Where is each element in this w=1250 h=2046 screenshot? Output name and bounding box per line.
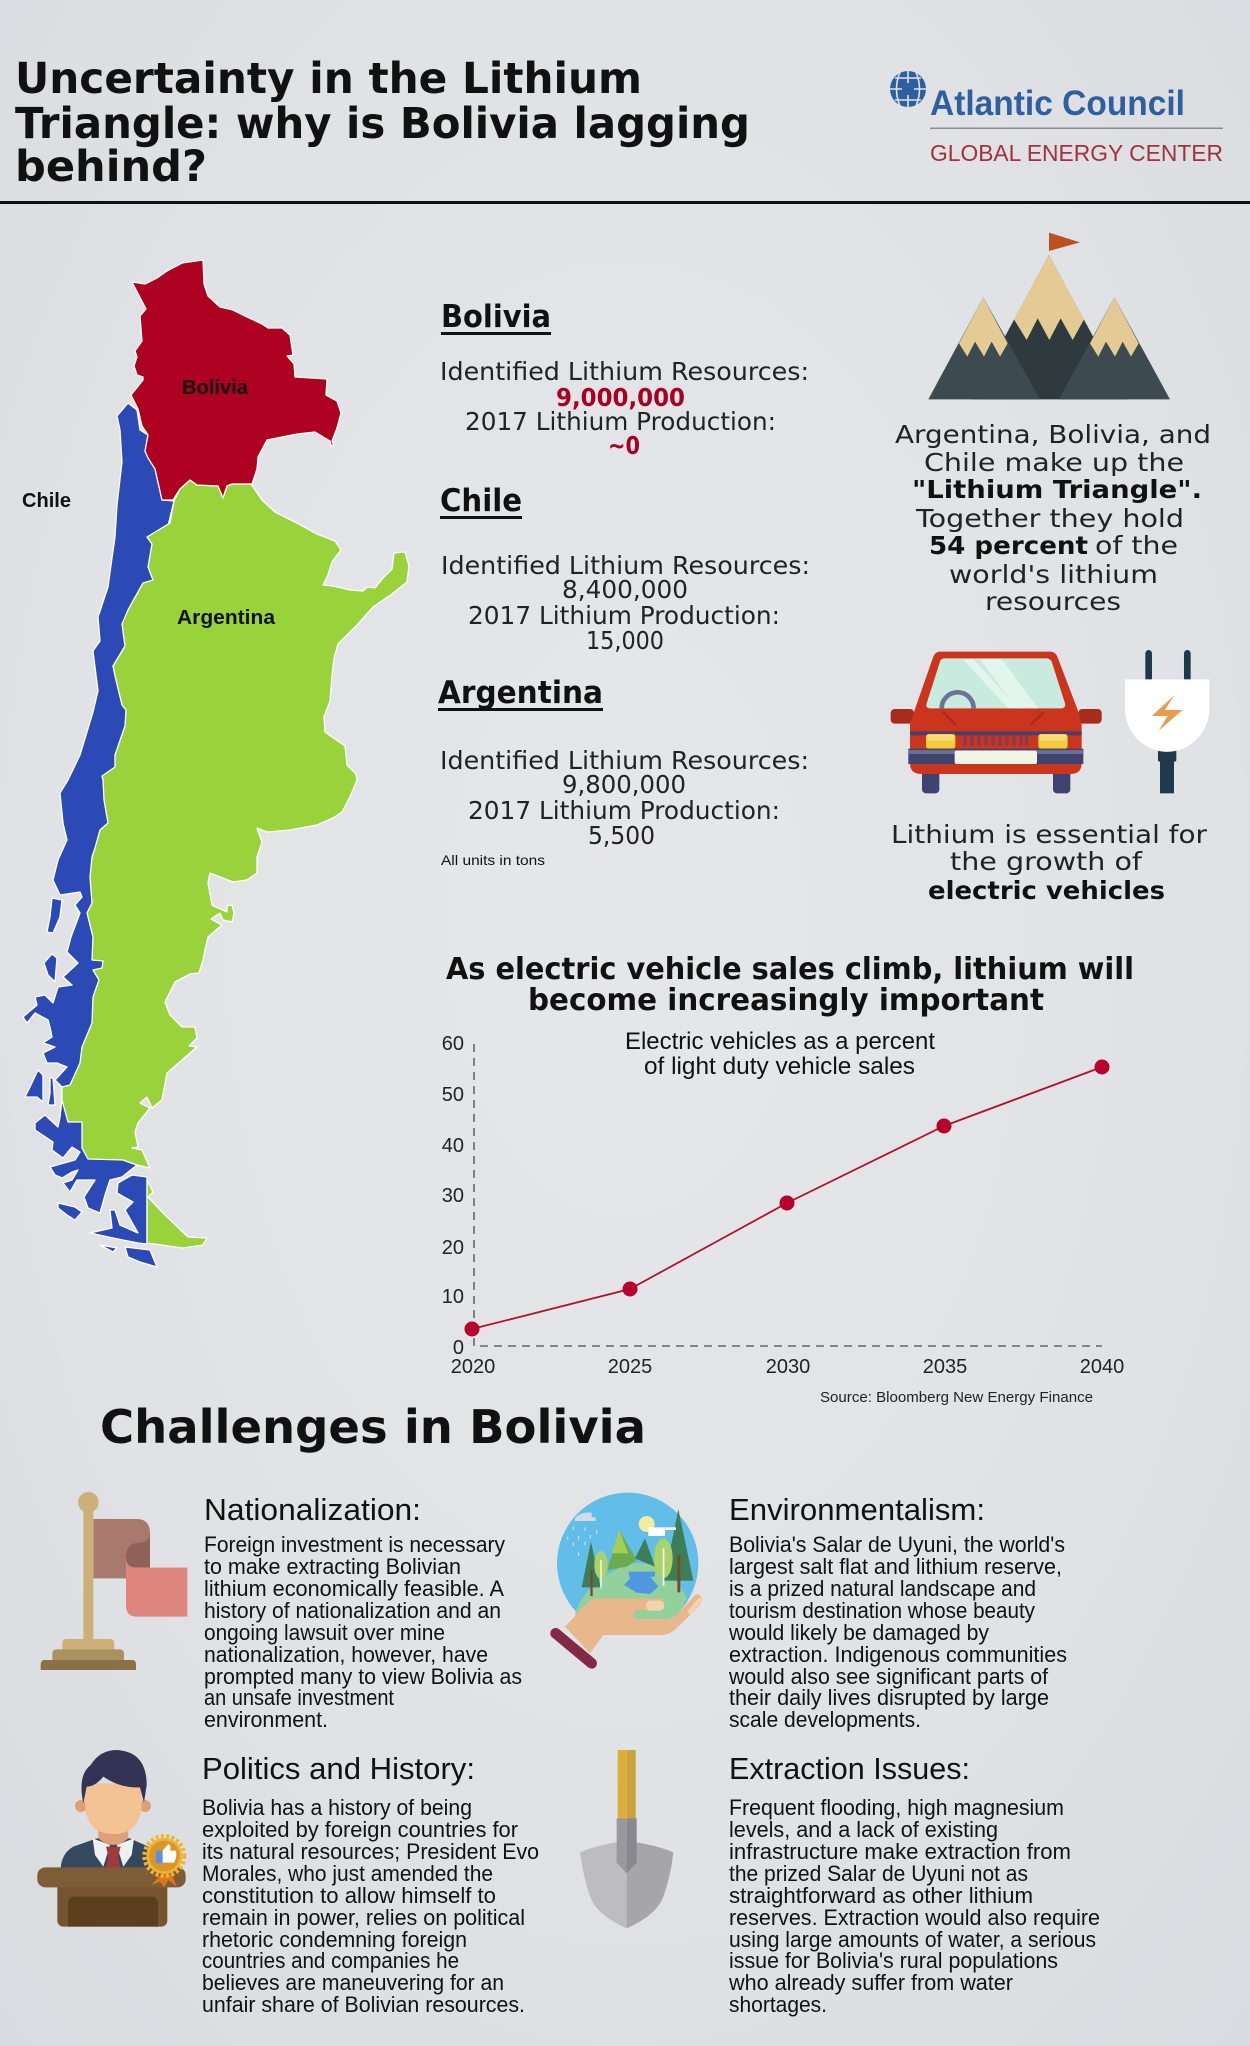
panel: Extraction Issues xyxy=(728,1751,1100,2017)
chart heading xyxy=(446,952,1134,1018)
source note: Source: Bloomberg New Energy Finance xyxy=(820,1389,1093,1406)
panel: Bolivia stats: Identified Lithium Resources: xyxy=(440,357,809,386)
panel: Extraction Issues: reserves. Extraction would also require xyxy=(729,1905,1100,1930)
map region: Bolivia xyxy=(131,260,341,500)
panel: Nationalization: ongoing lawsuit over mine xyxy=(204,1620,445,1645)
map label: Argentina: Argentina xyxy=(177,607,276,629)
map label: Chile: Chile xyxy=(22,490,71,512)
panel: Extraction Issues: shortages. xyxy=(729,1992,827,2017)
panel: Extraction Issues: straightforward as other lithium xyxy=(729,1883,1033,1908)
panel: Chile stats: 8,400,000 xyxy=(562,575,688,604)
panel: Politics and History: Bolivia has a history of being xyxy=(202,1795,472,1820)
panel: Environmentalism: their daily lives disrupted by large xyxy=(729,1685,1049,1710)
text: Lithium Triangle description: Argentina, Bolivia, and xyxy=(895,420,1211,449)
text: Lithium Triangle description: of the xyxy=(1095,531,1178,560)
y axis labels xyxy=(442,1033,464,1359)
y axis labels: 0 xyxy=(453,1337,464,1359)
panel: Environmentalism: tourism destination whose beauty xyxy=(729,1598,1035,1623)
x axis labels: 2035 xyxy=(923,1356,967,1378)
panel: Argentina stats: 9,800,000 xyxy=(562,770,686,799)
text: Lithium Triangle description: resources xyxy=(985,587,1121,616)
panel: Extraction Issues: Frequent flooding, high magnesium xyxy=(729,1795,1064,1820)
chart heading: become increasingly important xyxy=(528,983,1044,1018)
map of the Lithium Triangle xyxy=(23,260,409,1267)
y axis labels: 50 xyxy=(442,1084,464,1106)
chart subtitle: of light duty vehicle sales xyxy=(644,1053,915,1080)
icon: mountains with flag xyxy=(928,233,1170,399)
logo: Atlantic Council Global Energy Center: GLOBAL ENERGY CENTER xyxy=(930,140,1223,166)
panel: Politics and History: remain in power, relies on political xyxy=(202,1905,525,1930)
y axis labels: 10 xyxy=(442,1286,464,1308)
panel: Politics and History: exploited by foreign countries for xyxy=(202,1817,518,1842)
text: electric vehicles note: electric vehicles xyxy=(928,876,1165,905)
panel: Nationalization: environment. xyxy=(204,1707,328,1732)
panel: Politics and History xyxy=(202,1751,539,2017)
text: Lithium Triangle description: 54 percent xyxy=(929,531,1088,560)
panel: Nationalization: lithium economically feasible. A xyxy=(204,1576,504,1601)
panel: Bolivia stats: 9,000,000 xyxy=(556,383,685,412)
text: Lithium Triangle description: Chile make up the xyxy=(924,448,1184,477)
panel: Extraction Issues: infrastructure make extraction from xyxy=(729,1839,1071,1864)
panel: Extraction Issues: issue for Bolivia's rural populations xyxy=(729,1948,1058,1973)
icon: flag on pole xyxy=(41,1492,187,1670)
x axis labels xyxy=(451,1356,1124,1378)
panel: Chile stats: 15,000 xyxy=(586,626,664,655)
panel: Nationalization xyxy=(204,1492,522,1732)
panel: Argentina stats: 2017 Lithium Production: xyxy=(468,796,780,825)
title xyxy=(15,54,750,192)
panel: Nationalization: Foreign investment is necessary xyxy=(204,1532,505,1557)
panel: Chile stats: Chile xyxy=(440,483,522,519)
panel: Argentina stats: 5,500 xyxy=(588,821,655,850)
panel: Extraction Issues: who already suffer from water xyxy=(728,1970,1013,1995)
panel: Nationalization: to make extracting Bolivian xyxy=(204,1554,461,1579)
panel: Bolivia stats: Bolivia xyxy=(441,299,551,335)
panel: Environmentalism: scale developments. xyxy=(729,1707,921,1732)
panel: Bolivia stats xyxy=(440,299,809,460)
panel: Politics and History: constitution to allow himself to xyxy=(202,1883,496,1908)
y axis labels: 60 xyxy=(442,1033,464,1055)
panel: Politics and History: Morales, who just amended the xyxy=(202,1861,493,1886)
text: Lithium Triangle description: "Lithium Triangle". xyxy=(912,475,1202,504)
panel: Argentina stats: Argentina xyxy=(438,675,603,711)
panel: Argentina stats: Identified Lithium Resources: xyxy=(440,746,809,775)
logo: Atlantic Council Global Energy Center: Atlantic Council xyxy=(930,84,1185,123)
icon: hand holding landscape xyxy=(556,1493,702,1663)
text: Lithium Triangle description: Together they hold xyxy=(915,504,1184,533)
panel: Bolivia stats: ~0 xyxy=(608,431,640,460)
heading: Challenges in Bolivia: Challenges in Bolivia xyxy=(100,1400,646,1454)
map region: Argentina xyxy=(62,480,409,1248)
logo: Atlantic Council Global Energy Center xyxy=(890,71,1223,166)
chart subtitle xyxy=(625,1028,935,1080)
panel: Argentina stats xyxy=(438,675,809,868)
icon: electric plug xyxy=(1125,650,1209,793)
panel: Environmentalism: Bolivia's Salar de Uyuni, the world's xyxy=(729,1532,1065,1557)
title: behind? xyxy=(15,142,207,192)
panel: Extraction Issues: Extraction Issues: xyxy=(729,1751,970,1786)
panel: Nationalization: history of nationalization and an xyxy=(204,1598,501,1623)
panel: Environmentalism: Environmentalism: xyxy=(729,1492,985,1527)
panel: Nationalization: prompted many to view Bolivia as xyxy=(204,1664,522,1689)
line chart: EV share of sales xyxy=(442,1028,1124,1378)
panel: Politics and History: countries and companies he xyxy=(202,1948,459,1973)
y axis labels: 20 xyxy=(442,1237,464,1259)
x axis labels: 2040 xyxy=(1080,1356,1124,1378)
panel: Nationalization: an unsafe investment xyxy=(204,1685,394,1710)
panel: Chile stats xyxy=(440,483,810,655)
panel: Nationalization: Nationalization: xyxy=(204,1492,421,1527)
panel: Extraction Issues: levels, and a lack of existing xyxy=(729,1817,998,1842)
panel: Politics and History: its natural resources; President Evo xyxy=(202,1839,539,1864)
title: Triangle: why is Bolivia lagging xyxy=(15,99,750,149)
icon: red car xyxy=(891,652,1102,793)
text: electric vehicles note: the growth of xyxy=(950,847,1143,876)
panel: Politics and History: unfair share of Bolivian resources. xyxy=(202,1992,525,2017)
panel: Extraction Issues: using large amounts of water, a serious xyxy=(729,1927,1096,1952)
chart subtitle: Electric vehicles as a percent xyxy=(625,1028,935,1055)
text: electric vehicles note xyxy=(891,820,1208,905)
data line xyxy=(464,1060,1110,1336)
panel: Environmentalism: is a prized natural landscape and xyxy=(729,1576,1036,1601)
panel: Bolivia stats: 2017 Lithium Production: xyxy=(465,407,776,436)
title: Uncertainty in the Lithium xyxy=(15,54,642,104)
x axis labels: 2025 xyxy=(608,1356,652,1378)
text: Lithium Triangle description xyxy=(895,420,1211,616)
panel: Politics and History: believes are maneuvering for an xyxy=(202,1970,504,1995)
map region: Chile xyxy=(23,403,174,1267)
panel: Nationalization: nationalization, however, have xyxy=(204,1642,488,1667)
x axis labels: 2020 xyxy=(451,1356,495,1378)
icon: politician at podium xyxy=(37,1750,186,1927)
y axis labels: 40 xyxy=(442,1135,464,1157)
panel: Environmentalism: would also see significant parts of xyxy=(728,1664,1049,1689)
icon: shovel xyxy=(580,1750,673,1928)
panel: Environmentalism: extraction. Indigenous communities xyxy=(729,1642,1067,1667)
y axis labels: 30 xyxy=(442,1185,464,1207)
panel: Politics and History: rhetoric condemning foreign xyxy=(202,1927,467,1952)
panel: Environmentalism xyxy=(728,1492,1067,1732)
map label: Bolivia: Bolivia xyxy=(182,377,249,399)
panel: Environmentalism: largest salt flat and lithium reserve, xyxy=(729,1554,1062,1579)
panel: Chile stats: Identified Lithium Resources: xyxy=(441,551,810,580)
x axis labels: 2030 xyxy=(766,1356,810,1378)
panel: Politics and History: Politics and History: xyxy=(202,1751,475,1786)
chart heading: As electric vehicle sales climb, lithium will xyxy=(446,952,1134,987)
panel: Chile stats: 2017 Lithium Production: xyxy=(468,601,780,630)
icon: globe xyxy=(890,71,926,107)
panel: Extraction Issues: the prized Salar de Uyuni not as xyxy=(729,1861,1028,1886)
text: Lithium Triangle description: world's lithium xyxy=(949,560,1158,589)
panel: Environmentalism: would likely be damaged by xyxy=(728,1620,989,1645)
text: electric vehicles note: Lithium is essential for xyxy=(891,820,1208,849)
panel: Argentina stats: All units in tons xyxy=(441,852,545,868)
